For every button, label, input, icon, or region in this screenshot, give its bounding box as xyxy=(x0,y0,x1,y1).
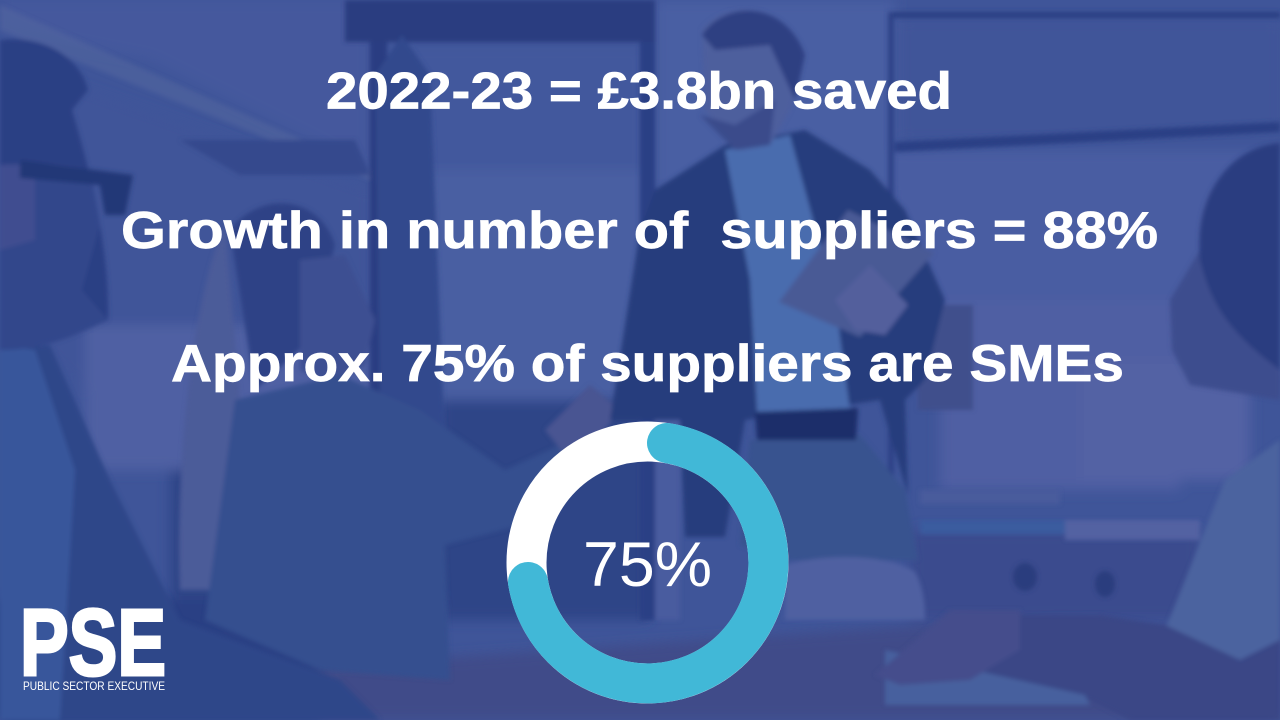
logo: PSE: PSE xyxy=(20,590,166,696)
donut chart: 75%: 75% xyxy=(583,530,712,600)
donut chart: 75% xyxy=(526,442,768,684)
logo: PSE: PUBLIC SECTOR EXECUTIVE xyxy=(23,679,165,693)
stat: savings: 2022-23 = £3.8bn saved xyxy=(326,62,952,120)
standing man, centre xyxy=(610,10,945,560)
white chair xyxy=(785,557,925,620)
woman, right xyxy=(875,143,1280,720)
left man xyxy=(0,39,380,720)
woman, centre left xyxy=(179,203,620,680)
stat: share of SMEs: Approx. 75% of suppliers are SMEs xyxy=(171,335,1124,393)
stat: supplier growth: Growth in number of suppliers = 88% xyxy=(121,202,1158,260)
